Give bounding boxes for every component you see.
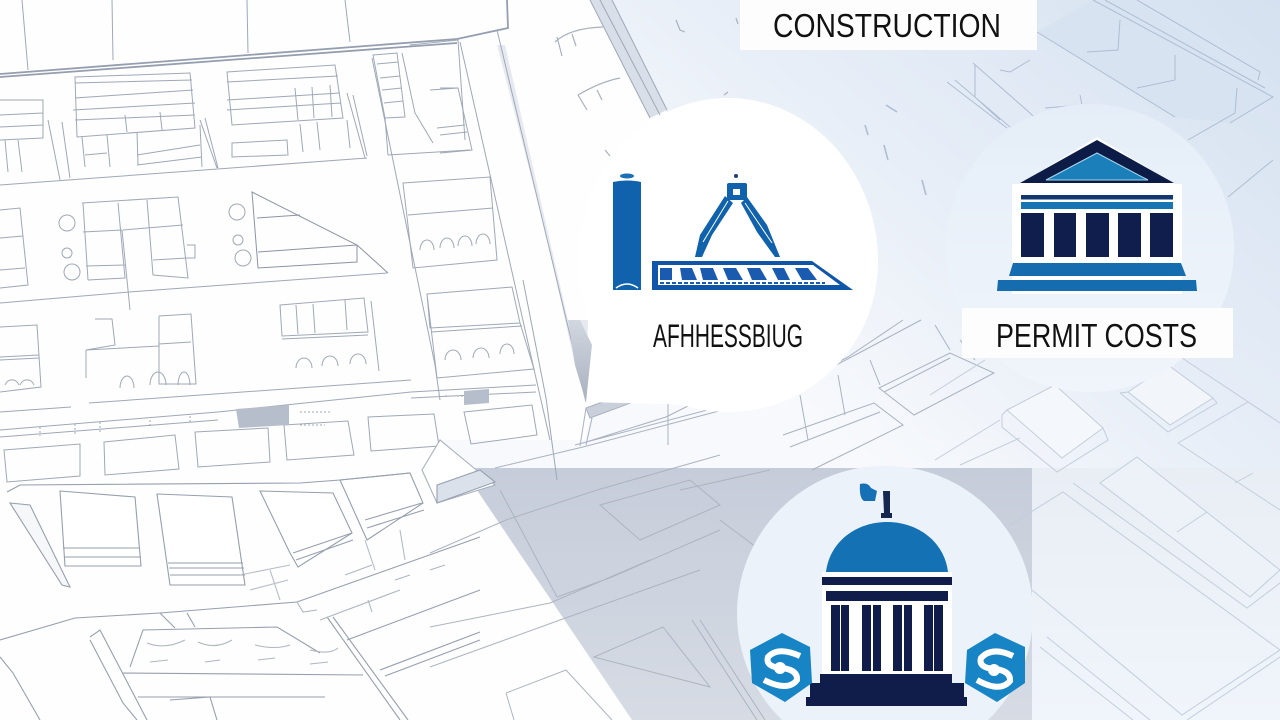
block row 3: [0, 325, 41, 392]
site plan lower left: [0, 440, 495, 720]
icon: drafting column, compass and ruler: [613, 174, 853, 290]
site plan lower right: [930, 340, 1280, 720]
label: construction: [740, 0, 1037, 50]
site plan upper left: [0, 0, 667, 482]
block row 1: [0, 100, 70, 180]
icon: right currency badge: [965, 633, 1025, 702]
road marks top centre: [555, 18, 738, 156]
grey hatch blocks: [236, 389, 489, 428]
site plan under circle and in shaded area: [430, 320, 994, 720]
label: construction: CONSTRUCTION: [773, 7, 1001, 44]
icon: domed government building: [750, 484, 1025, 706]
bottom strip: [0, 385, 536, 437]
icon: road sliver beside circle: [568, 320, 592, 402]
icon: classical building: [997, 137, 1197, 294]
grey road band left of circle: [497, 45, 597, 402]
panel: government fees: [737, 466, 1033, 720]
panel: permit costs: [946, 104, 1234, 392]
garbled caption: AFHHESSBIUG: [653, 318, 803, 354]
grey road band top centre: [590, 0, 667, 118]
block row 2: [0, 208, 28, 288]
icon: left currency badge: [750, 633, 812, 702]
panel: architectural fees: [568, 98, 878, 412]
label: permit costs: [962, 308, 1233, 358]
site plan top right: [865, 0, 1273, 197]
label: permit costs: PERMIT COSTS: [996, 317, 1197, 354]
